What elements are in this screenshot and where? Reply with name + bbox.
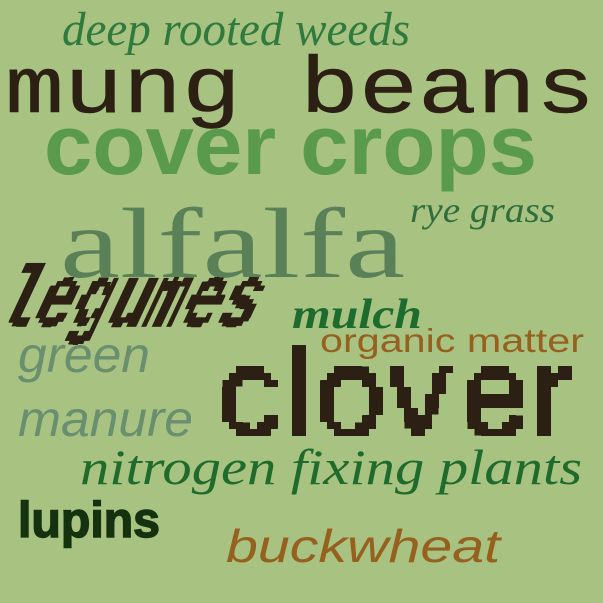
word: nitrogen fixing plants: nitrogen fixing plants — [80, 439, 582, 495]
word: mung beans: mung beans — [5, 46, 595, 137]
word: lupins: lupins — [18, 492, 160, 548]
word: cover crops: cover crops — [44, 98, 537, 192]
word: organic matter: organic matter — [320, 322, 584, 359]
word: clover: clover — [218, 324, 574, 462]
word: mulch: mulch — [292, 292, 422, 338]
word: green: green — [18, 327, 150, 383]
word: manure: manure — [18, 391, 193, 447]
word: deep rooted weeds: deep rooted weeds — [62, 3, 410, 56]
word: rye grass: rye grass — [410, 190, 555, 230]
word: buckwheat: buckwheat — [226, 520, 503, 572]
word: alfalfa: alfalfa — [60, 188, 405, 299]
